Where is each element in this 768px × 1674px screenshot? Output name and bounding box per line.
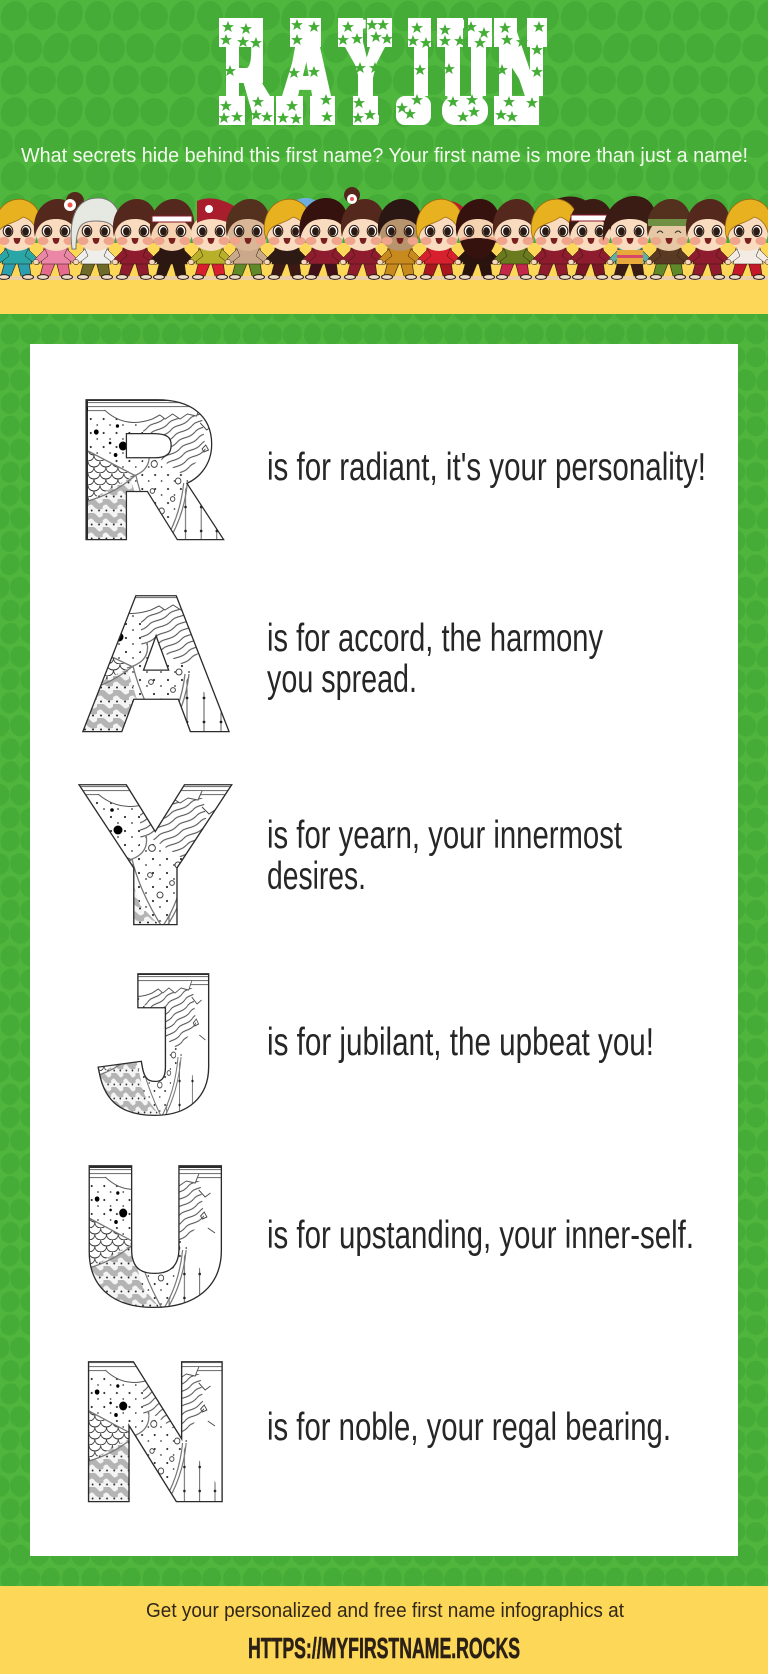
footer: yellow call to action bar: Get your personalized and free first name infographics at — [146, 1600, 624, 1622]
subtitle: What secrets hide behind this first name? Your first name is more than just a name! — [21, 145, 748, 167]
row A: letter and meaning: is for accord, the harmony — [267, 617, 603, 660]
row J: letter and meaning: is for jubilant, the upbeat you! — [267, 1021, 654, 1064]
title: RAYJUN star-filled letters — [218, 0, 547, 156]
row Y: letter and meaning — [78, 784, 622, 926]
row R: letter and meaning: R — [80, 367, 215, 573]
row A: letter and meaning: A — [85, 562, 227, 767]
row Y: letter and meaning: Y — [88, 752, 222, 957]
row N: letter and meaning: N — [82, 1329, 228, 1534]
row N: letter and meaning — [88, 1361, 668, 1502]
yellow band behind characters — [0, 243, 768, 314]
row Y: letter and meaning: desires. — [267, 855, 366, 898]
footer: yellow call to action bar: HTTPS://MYFIRSTNAME.ROCKS — [248, 1633, 520, 1665]
row A: letter and meaning: you spread. — [267, 658, 417, 701]
panel: white name meaning panel — [30, 344, 738, 1556]
row J: letter and meaning — [97, 973, 652, 1116]
row U: letter and meaning: U — [84, 1134, 226, 1339]
illustration: row of cartoon characters — [0, 187, 768, 279]
row U: letter and meaning — [88, 1165, 692, 1308]
footer: yellow call to action bar — [0, 1586, 768, 1674]
row R: letter and meaning — [85, 399, 704, 540]
row A: letter and meaning — [82, 595, 603, 732]
row Y: letter and meaning: is for yearn, your innermost — [267, 814, 622, 857]
row J: letter and meaning: J — [104, 941, 215, 1146]
